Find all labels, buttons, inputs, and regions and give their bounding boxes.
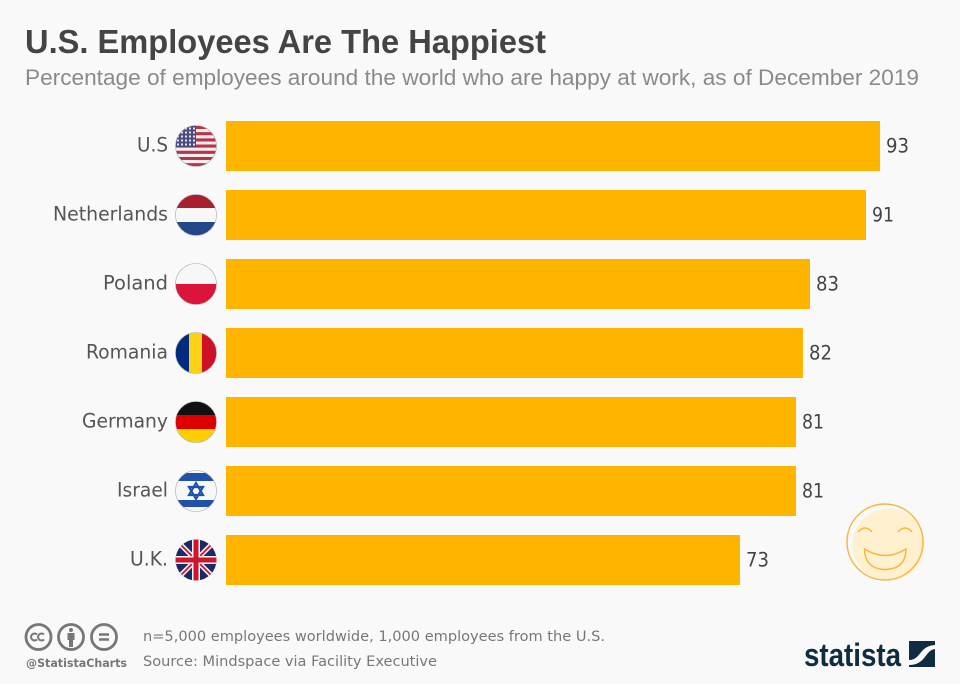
row: U.K.: 73 — [746, 548, 769, 572]
credit handle: @StatistaCharts — [26, 656, 127, 670]
icon: Netherlands flag — [177, 194, 215, 236]
icon: Romania flag — [175, 332, 217, 374]
subtitle: Percentage of employees around the world who are happy at work, as of December 2019 — [25, 65, 919, 90]
row: Germany: 81 — [802, 410, 824, 434]
row: Poland: Poland — [103, 272, 168, 294]
row: Romania: Romania — [86, 340, 168, 364]
icon: US flag — [175, 125, 217, 167]
row: Netherlands: Netherlands — [53, 202, 168, 226]
row: U.K.: U.K. — [130, 548, 168, 570]
row: Germany: Germany — [82, 410, 168, 432]
title: U.S. Employees Are The Happiest — [25, 23, 546, 60]
flag outlines — [176, 126, 216, 512]
row: Romania: 82 — [809, 342, 832, 364]
row: Romania — [86, 328, 832, 378]
bar chart — [53, 121, 909, 585]
row: Israel — [117, 466, 824, 516]
row: U.K. — [130, 535, 769, 585]
row: Poland — [103, 259, 839, 309]
row: Netherlands — [53, 190, 894, 240]
row: Poland: 83 — [816, 272, 839, 296]
source: Source: Mindspace via Facility Executive — [143, 654, 437, 670]
footnote: n=5,000 employees worldwide, 1,000 employees from the U.S. — [143, 629, 605, 645]
icon: Poland flag — [176, 284, 216, 304]
row: U.S: 93 — [886, 134, 909, 158]
icon: UK flag — [175, 539, 217, 581]
row: U.S — [137, 121, 909, 171]
icon: Germany flag — [175, 401, 217, 444]
statista logo: statista — [804, 637, 901, 673]
row: Israel: Israel — [117, 478, 168, 502]
row: Netherlands: 91 — [872, 204, 894, 226]
icon: Israel flag — [178, 473, 214, 507]
row: Israel: 81 — [802, 480, 824, 502]
icon: smiley face — [847, 504, 924, 580]
icon: creative commons — [26, 624, 116, 650]
row: U.S: U.S — [137, 134, 168, 156]
row: Germany — [82, 397, 824, 447]
